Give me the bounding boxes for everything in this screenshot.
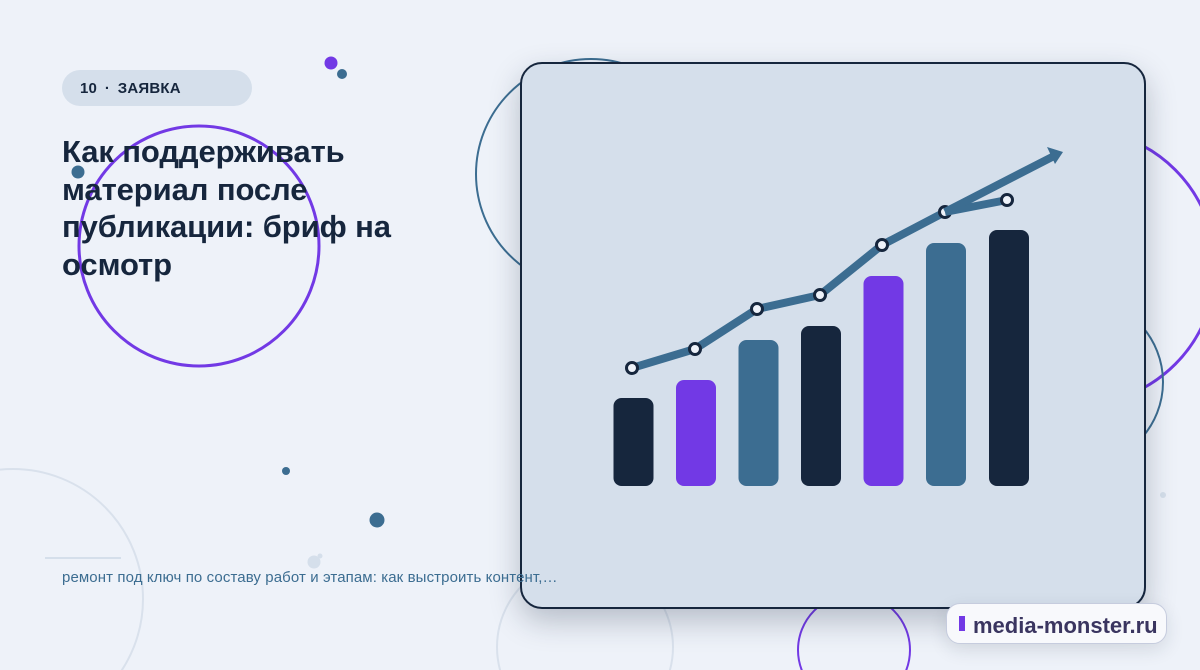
tag pill [62, 70, 252, 106]
bars [614, 230, 1029, 486]
brand accent bar [959, 616, 965, 631]
trend line [626, 194, 1012, 374]
subtitle text: ремонт под ключ по составу работ и этапам: как выстроить контент,… [62, 569, 558, 586]
brand badge [946, 603, 1167, 644]
arrow [945, 147, 1063, 212]
title: осмотр [62, 246, 172, 282]
title [62, 134, 392, 282]
title: Как поддерживать [62, 134, 345, 169]
tag text: 10 · ЗАЯВКА [80, 80, 181, 97]
panel: chart card [520, 62, 1146, 609]
brand name: media-monster.ru [973, 613, 1158, 638]
title: материал после [62, 172, 307, 206]
title: публикации: бриф на [62, 209, 391, 244]
